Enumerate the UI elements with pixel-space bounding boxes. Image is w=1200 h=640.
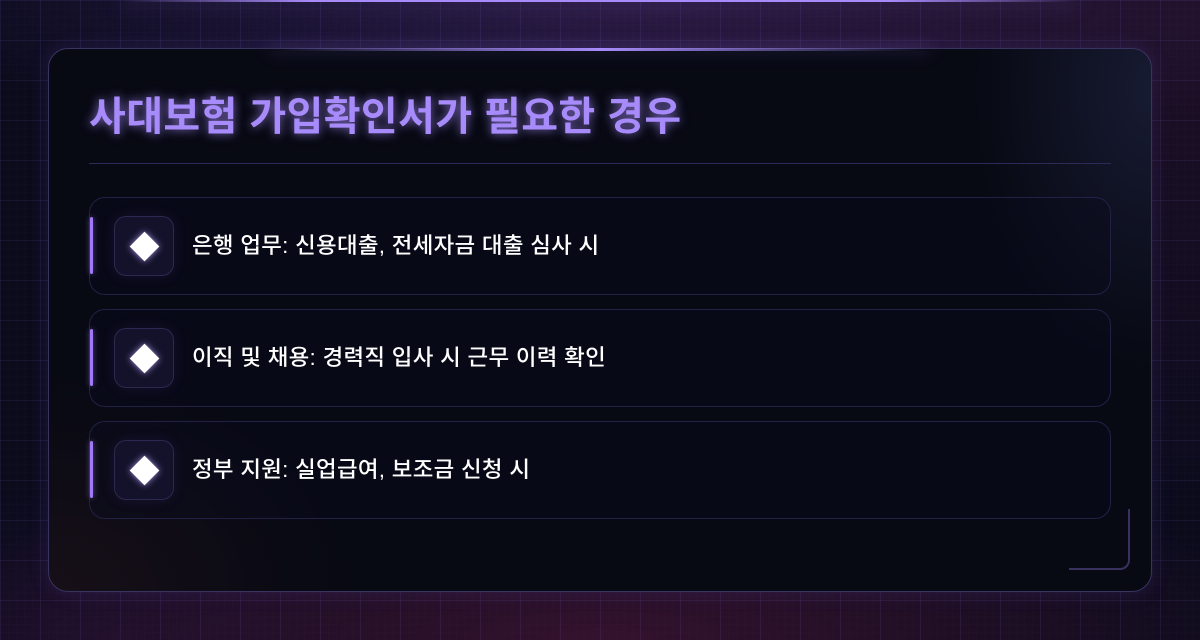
corner bracket [1069, 509, 1130, 570]
list item: bank [89, 197, 1111, 295]
accent bar [90, 329, 92, 386]
accent bar [90, 217, 92, 274]
item text: 정부 지원: 실업급여, 보조금 신청 시 [192, 457, 530, 482]
panel: main card [48, 48, 1152, 592]
title: 사대보험 가입확인서가 필요한 경우 [89, 95, 682, 139]
accent bar [90, 441, 92, 498]
list item: employment [89, 309, 1111, 407]
list item: government [89, 421, 1111, 519]
item text: 은행 업무: 신용대출, 전세자금 대출 심사 시 [192, 233, 599, 258]
card top glow line [268, 48, 932, 51]
top glow bar [120, 0, 1080, 2]
item text: 이직 및 채용: 경력직 입사 시 근무 이력 확인 [192, 345, 606, 370]
icon: diamond [114, 440, 174, 500]
icon: diamond [114, 328, 174, 388]
icon: diamond [114, 216, 174, 276]
